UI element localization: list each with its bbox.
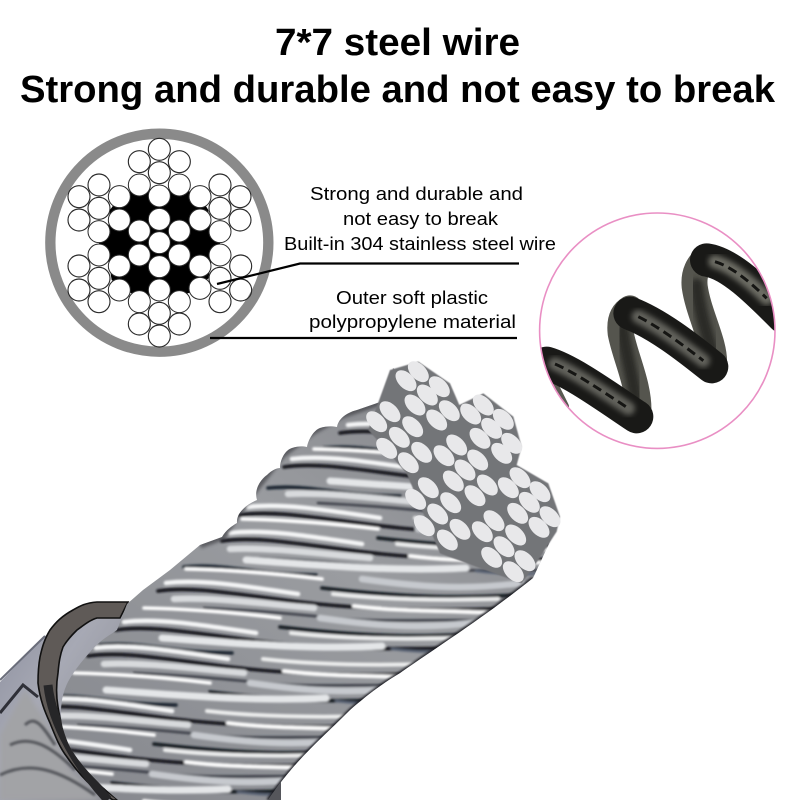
spring front strands (547, 260, 783, 417)
label: steel wire: Built-in 304 stainless steel wire (284, 233, 556, 254)
steel strands (61, 368, 551, 800)
title: 7*7 steel wire (275, 22, 520, 64)
inset: coiled black cable in pink circle (540, 213, 783, 448)
cable jacket sheath (0, 602, 281, 800)
white inner wires on black (88, 174, 231, 313)
label: outer plastic: polypropylene material (309, 311, 516, 332)
outer plastic sheath ring (50, 134, 268, 352)
label: outer plastic: Outer soft plastic (336, 287, 488, 308)
label: steel wire: not easy to break (343, 208, 499, 229)
title: Strong and durable and not easy to break (20, 69, 776, 111)
spring back strands (548, 258, 714, 413)
leader line: plastic (210, 337, 517, 339)
diagram: 7*7 cross-section of the cable (50, 134, 268, 352)
wire strand ends (362, 357, 564, 586)
title (20, 22, 776, 111)
label: outer plastic (309, 287, 516, 332)
pink circle outline (540, 213, 775, 448)
outlined outer wires (68, 138, 252, 347)
cable end face with cut wire ends (362, 357, 564, 586)
dark backing between wires (368, 362, 560, 583)
black core filling (99, 187, 220, 297)
leader line: steel wire (217, 264, 519, 284)
label: steel wire: Strong and durable and (310, 183, 523, 204)
label: steel wire (284, 183, 556, 254)
